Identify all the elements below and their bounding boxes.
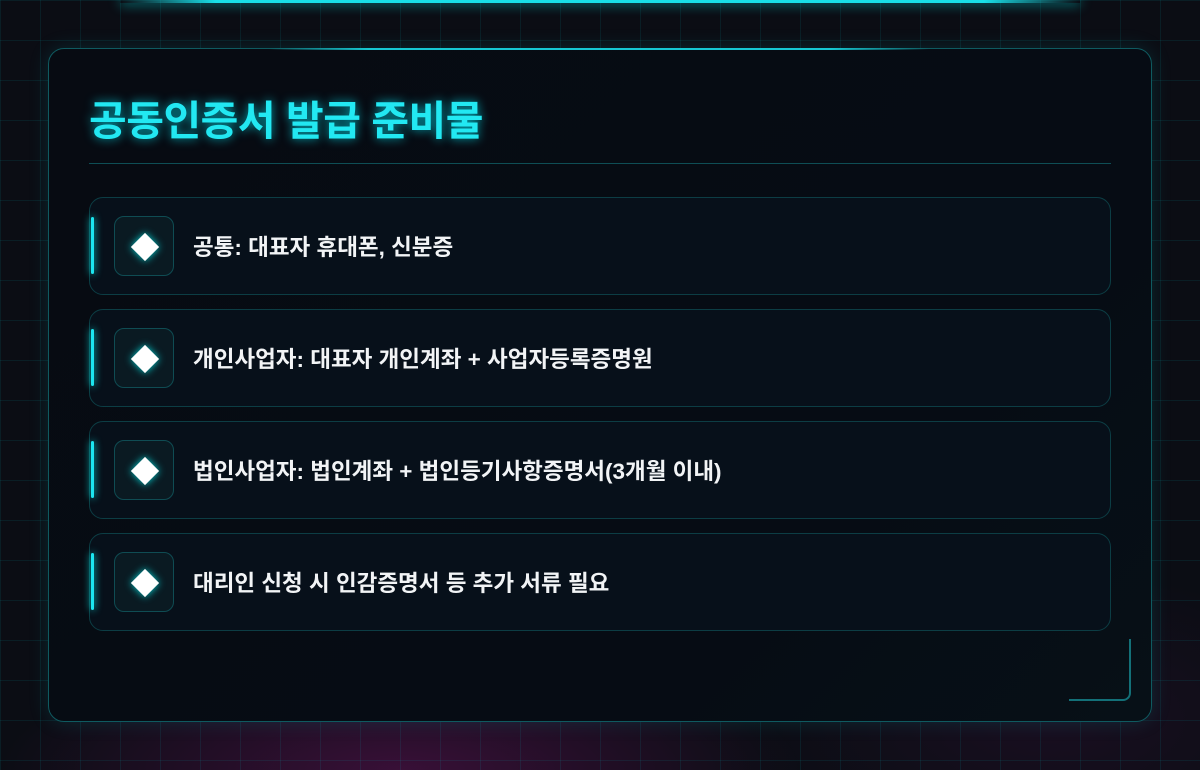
text: 개인사업자: 대표자 개인계좌 + 사업자등록증명원 [193,347,653,372]
icon: diamond [114,216,174,276]
item: corporate [89,421,1111,519]
text: 법인사업자: 법인계좌 + 법인등기사항증명서(3개월 이내) [193,459,722,484]
item: common [89,197,1111,295]
text: 공통: 대표자 휴대폰, 신분증 [193,235,453,260]
item: agent [89,533,1111,631]
icon: diamond [114,552,174,612]
icon: diamond [114,328,174,388]
text: 대리인 신청 시 인감증명서 등 추가 서류 필요 [193,571,609,596]
icon: diamond [114,440,174,500]
title: 공동인증서 발급 준비물 [89,98,483,144]
item: individual [89,309,1111,407]
